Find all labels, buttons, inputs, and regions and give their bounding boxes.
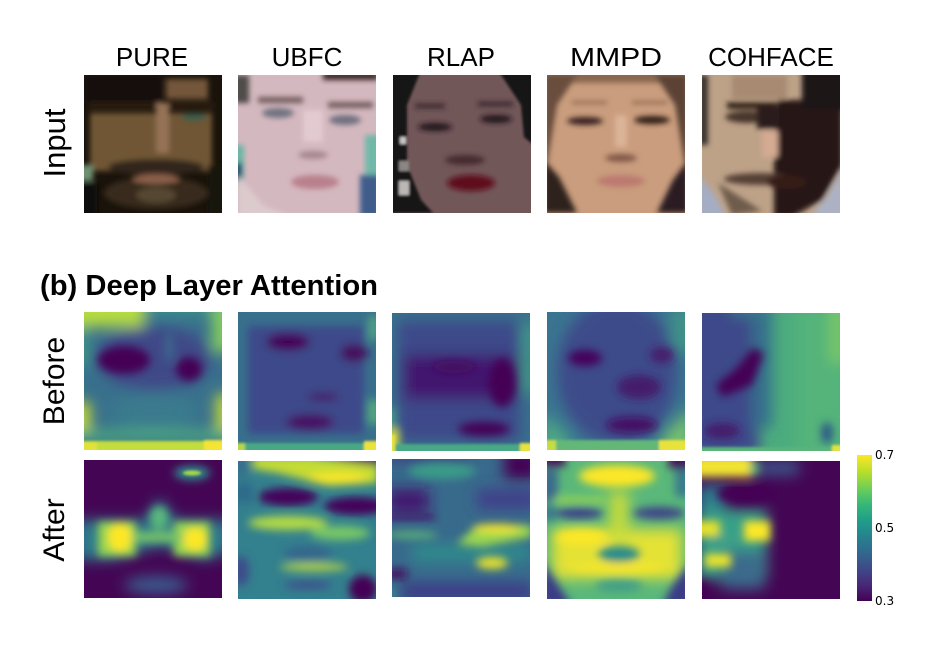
after heatmap: RLAP [392,459,530,597]
input face: UBFC [238,75,376,213]
input face: RLAP [393,75,531,213]
before heatmap: MMPD [547,312,685,450]
input face: COHFACE [702,75,840,213]
input face: PURE [84,75,222,213]
before heatmap: RLAP [392,313,530,451]
after heatmap: MMPD [547,461,685,599]
title: RLAP: RLAP [427,42,495,72]
colorbar label 0.5: 0.5 [875,521,894,535]
colorbar label 0.7: 0.7 [875,448,894,462]
after heatmap: PURE [84,460,222,598]
after heatmap: COHFACE [702,461,840,599]
after heatmap: UBFC [238,461,376,599]
colorbar [857,448,894,608]
colorbar label 0.3: 0.3 [875,594,894,608]
before heatmap: PURE [84,312,222,450]
section heading: (b) Deep Layer Attention [40,270,378,302]
row label: Input: Input [37,108,72,177]
title: UBFC: UBFC [272,42,342,72]
before heatmap: UBFC [238,312,376,450]
title: COHFACE: COHFACE [708,42,834,72]
before heatmap: COHFACE [702,313,840,451]
column titles [116,42,834,72]
row label: Before: Before [38,337,71,425]
input face: MMPD [544,70,688,213]
title: MMPD: MMPD [570,42,662,72]
title: PURE: PURE [116,42,188,72]
row label: After: After [38,498,71,562]
